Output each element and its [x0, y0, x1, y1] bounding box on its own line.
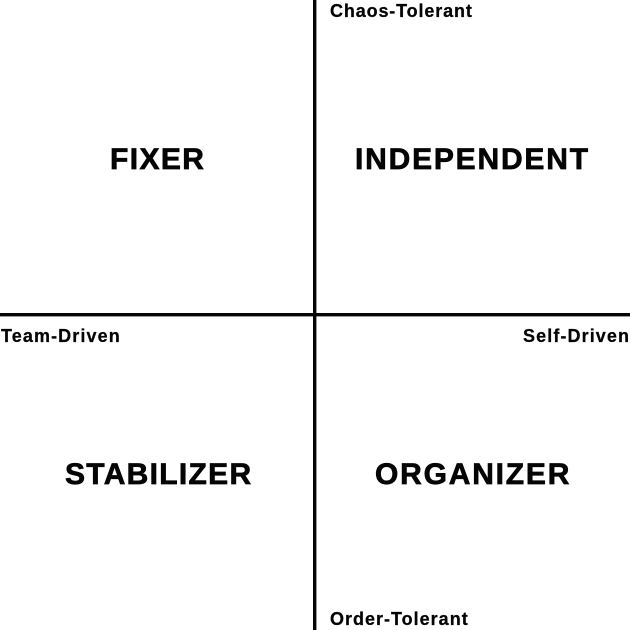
quadrant heading: Stabilizer: STABILIZER — [65, 458, 252, 490]
axis label: Order-Tolerant: Order-Tolerant — [330, 609, 469, 629]
axis label: Team-Driven: Team-Driven — [1, 326, 121, 346]
quadrant heading: Independent: INDEPENDENT — [355, 142, 590, 176]
axis label: Self-Driven: Self-Driven — [523, 326, 630, 346]
quadrant heading: Organizer: ORGANIZER — [375, 458, 571, 490]
quadrant heading: Fixer: FIXER — [110, 142, 205, 176]
horizontal axis — [0, 313, 630, 316]
vertical axis — [313, 0, 316, 630]
axis label: Chaos-Tolerant: Chaos-Tolerant — [330, 1, 473, 21]
